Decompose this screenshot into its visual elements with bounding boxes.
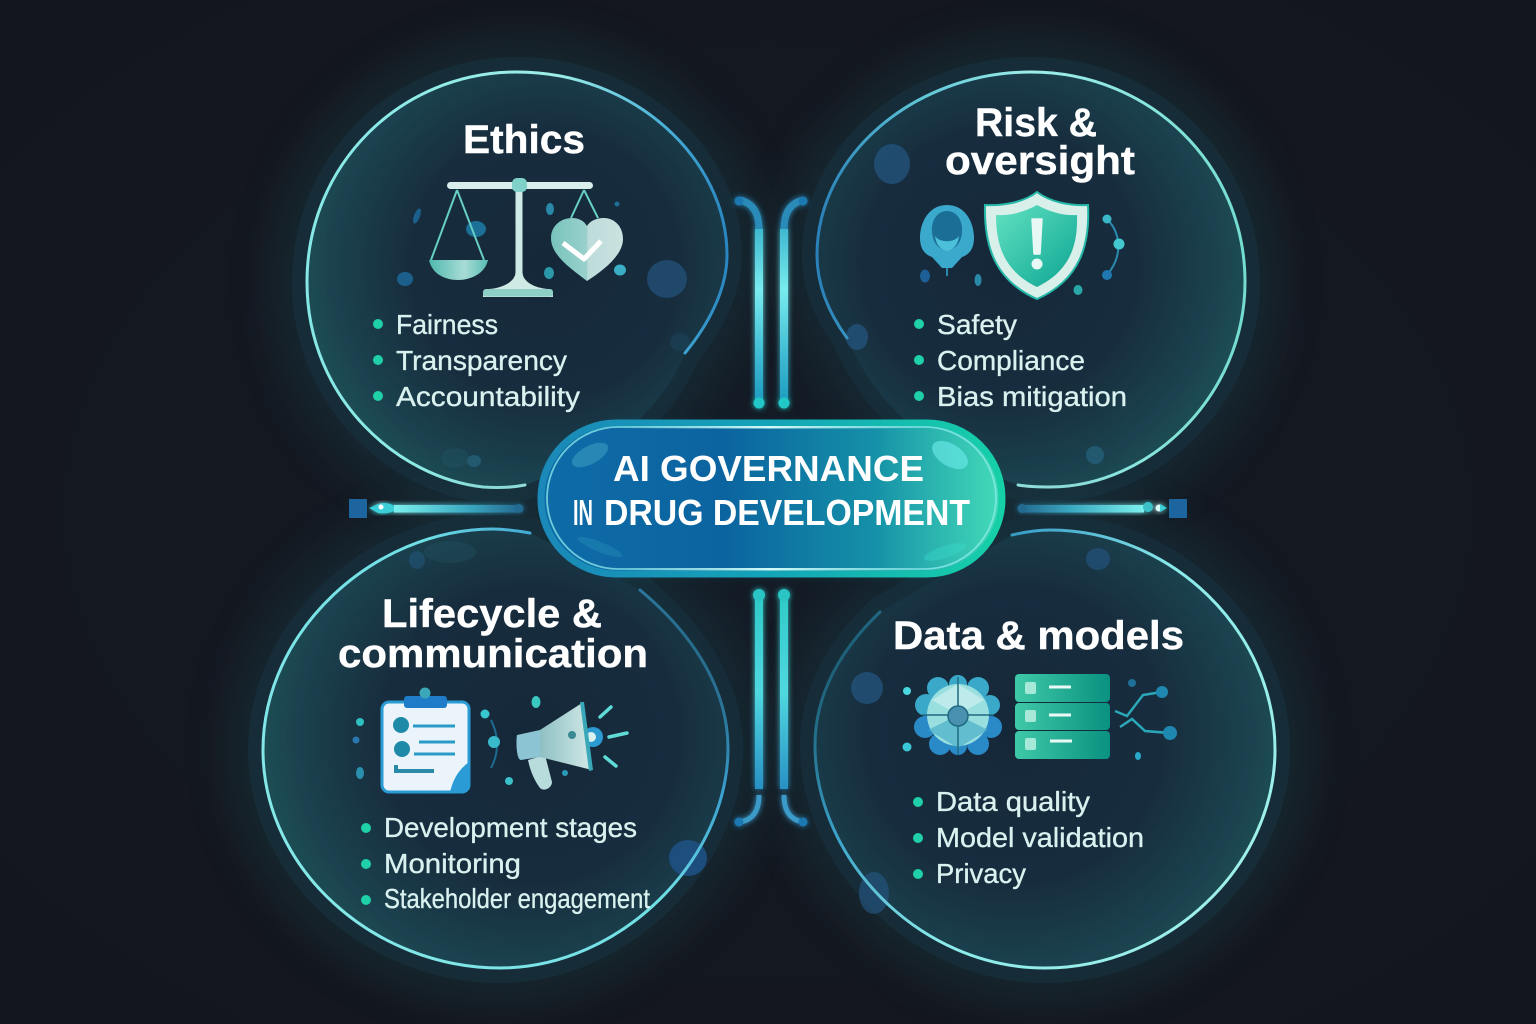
list: data and models: Data quality: [936, 786, 1090, 817]
connector: bottom pair: [734, 589, 808, 826]
icon: branching network: [1115, 679, 1177, 760]
central title pill: [541, 423, 1002, 574]
panel: data and models: [815, 530, 1275, 968]
panel: lifecycle and communication: [263, 529, 728, 968]
list: ethics: [373, 309, 580, 412]
list: risk and oversight: Safety: [937, 309, 1017, 340]
list: data and models: Privacy: [936, 858, 1026, 889]
panel: ethics: [307, 72, 727, 488]
list: data and models: [913, 786, 1144, 889]
heading: lifecycle and communication: [338, 592, 648, 676]
icon: database stack: [1015, 674, 1110, 759]
list: lifecycle and communication: Stakeholder engagement: [384, 883, 650, 914]
icon: scales and heart: [397, 178, 626, 297]
list: ethics: Transparency: [396, 345, 567, 376]
list: ethics: Fairness: [396, 309, 498, 340]
list: ethics: Accountability: [396, 381, 580, 412]
icon: clipboard: [352, 688, 469, 792]
heading: lifecycle and communication: communication: [338, 632, 648, 676]
list: lifecycle and communication: [361, 812, 650, 914]
list: risk and oversight: [914, 309, 1127, 412]
heading: risk and oversight: [945, 101, 1135, 183]
ring: data and models: [815, 530, 1275, 968]
title text: [573, 448, 970, 533]
heading: data and models: Data & models: [893, 614, 1184, 658]
heading: risk and oversight: Risk &: [975, 101, 1097, 145]
icon: operator head: [920, 205, 982, 286]
list: risk and oversight: Compliance: [937, 345, 1085, 376]
panel: risk and oversight: [817, 72, 1245, 487]
title text: IN: [573, 492, 593, 533]
icon: node arc: [480, 710, 500, 768]
title text: DRUG DEVELOPMENT: [604, 492, 970, 533]
ring: ethics: [307, 72, 727, 488]
ring: risk and oversight: [817, 72, 1245, 487]
icon: megaphone: [505, 696, 627, 790]
heading: risk and oversight: oversight: [945, 139, 1135, 183]
list: risk and oversight: Bias mitigation: [937, 381, 1127, 412]
list: lifecycle and communication: Development stages: [384, 812, 637, 843]
title text: AI GOVERNANCE: [613, 448, 924, 489]
connector: left: [349, 499, 524, 518]
icon: warning shield: [985, 192, 1088, 299]
icon: neural sphere: [902, 675, 1002, 755]
list: lifecycle and communication: Monitoring: [384, 848, 521, 879]
heading: lifecycle and communication: Lifecycle &: [382, 592, 602, 636]
list: data and models: Model validation: [936, 822, 1144, 853]
icon: node arc: [1102, 214, 1124, 280]
connector: top pair: [734, 196, 808, 408]
connector: right: [1018, 499, 1187, 518]
heading: ethics: Ethics: [463, 118, 585, 162]
ring: lifecycle and communication: [263, 529, 728, 968]
